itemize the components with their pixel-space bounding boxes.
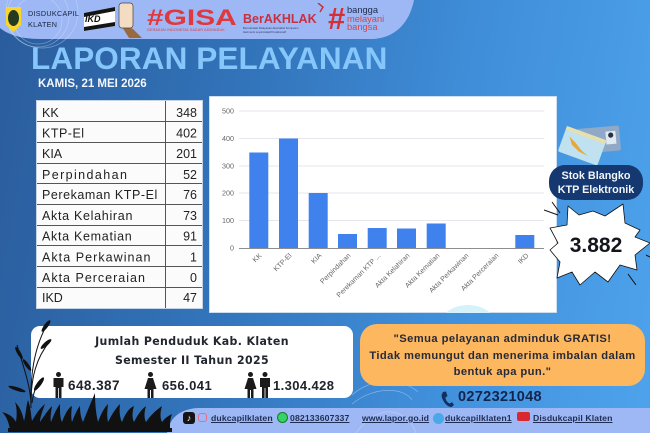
logo and agency name: KLATEN [28, 20, 57, 28]
twitter handle: dukcapilklaten1 [445, 413, 512, 423]
service table: 47 [183, 291, 197, 305]
bangga melayani bangsa logo: melayani [347, 14, 384, 24]
bar chart: IKD [517, 252, 530, 266]
stock number burst [544, 202, 650, 286]
bar chart: KIA [310, 252, 324, 265]
population panel [31, 326, 353, 398]
stock label: Stok Blangko [562, 170, 630, 182]
website: www.lapor.go.id [362, 413, 429, 423]
icon: twitter [433, 413, 444, 424]
female count: 656.041 [162, 378, 212, 393]
icon: instagram [198, 413, 207, 422]
service table: Akta Perceraian [42, 271, 146, 285]
service table [37, 101, 202, 308]
bar chart: Akta Perceraian [460, 252, 500, 293]
service table: KK [42, 106, 59, 120]
stock label [549, 165, 643, 200]
logo and agency name: DISDUKCAPIL [28, 9, 79, 18]
bar chart: Akta Kelahiran [374, 252, 411, 290]
total count: 1.304.428 [273, 378, 334, 393]
date: KAMIS, 21 MEI 2026 [38, 78, 147, 90]
service table: IKD [42, 291, 63, 305]
phone number: 0272321048 [458, 389, 542, 405]
social media footer [183, 412, 613, 424]
bar chart: 0 [230, 244, 234, 252]
icon: tiktok: ♪ [187, 413, 191, 423]
youtube channel: Disdukcapil Klaten [533, 413, 613, 423]
GISA logo: #GISA [147, 5, 237, 30]
bangga melayani bangsa logo: # [328, 1, 345, 36]
bar chart: 200 [222, 188, 234, 198]
service table: 76 [183, 188, 197, 202]
service table: 73 [183, 209, 197, 223]
icon: tiktok [183, 412, 195, 424]
bar chart: KK [252, 252, 264, 264]
free service callout: Tidak memungut dan menerima imbalan dalam [369, 350, 636, 362]
stock number burst: 3.882 [570, 234, 622, 257]
icon: youtube [517, 412, 530, 421]
icon: ID cards [558, 126, 621, 165]
bar chart: 100 [222, 216, 234, 225]
service table: 52 [183, 168, 197, 182]
free service callout [360, 324, 645, 386]
BerAKHLAK logo: BerAKHLAK [243, 12, 317, 26]
whatsapp number: 082133607337 [290, 413, 349, 423]
reeds and grass silhouette [2, 320, 172, 432]
IKD logo with phone: IKD [85, 14, 100, 24]
population heading: Semester II Tahun 2025 [115, 353, 269, 367]
IKD logo with phone [84, 2, 142, 38]
male count: 648.387 [68, 378, 120, 393]
bangga melayani bangsa logo: bangga [347, 5, 378, 15]
total count [244, 372, 334, 398]
bar chart [209, 96, 557, 313]
bar chart: Perpindahan [319, 252, 352, 285]
service table: 402 [176, 126, 197, 140]
service table: 91 [183, 230, 197, 244]
service table: 1 [190, 250, 197, 264]
population heading: Jumlah Penduduk Kab. Klaten [95, 334, 289, 348]
BerAKHLAK logo [243, 3, 324, 34]
service table: KIA [42, 147, 63, 161]
population heading [94, 334, 289, 367]
icon: whatsapp [277, 412, 288, 423]
bar chart: Akta Perkawinan [428, 252, 470, 295]
GISA logo: GERAKAN INDONESIA SADAR ADMINDUK [147, 28, 225, 32]
service table: KTP-El [42, 126, 85, 140]
free service callout: "Semua pelayanan adminduk GRATIS! [394, 333, 611, 345]
bar chart: 500 [222, 106, 234, 116]
stock label: KTP Elektronik [558, 184, 634, 196]
logo and agency name [6, 7, 79, 32]
free service callout: bentuk apa pun." [454, 366, 551, 378]
service table: 348 [176, 106, 197, 120]
bar chart: Perekaman KTP ... [336, 252, 382, 299]
service table: Akta Kematian [42, 230, 132, 244]
bar chart: KTP-El [273, 252, 294, 273]
bangga melayani bangsa logo [328, 1, 384, 36]
tiktok and instagram handle: dukcapilklaten [211, 413, 273, 423]
title: LAPORAN PELAYANAN [31, 40, 387, 76]
bangga melayani bangsa logo: bangsa [347, 22, 378, 32]
bar chart: 400 [222, 134, 234, 143]
service table: 201 [176, 147, 197, 161]
female count [144, 372, 212, 398]
bar chart: Akta Kematian [404, 252, 441, 290]
BerAKHLAK logo: Berorientasi Pelayanan Akuntabel Kompeten [243, 26, 299, 30]
bar chart: 300 [222, 162, 234, 170]
service table: Perekaman KTP-El [42, 188, 158, 202]
service table: Akta Kelahiran [42, 209, 133, 223]
service table: Akta Perkawinan [42, 250, 152, 264]
service table: Perpindahan [42, 168, 128, 182]
BerAKHLAK logo: Harmonis Loyal Adaptif Kolaboratif [243, 30, 286, 34]
service table: 0 [190, 271, 197, 285]
male count [54, 372, 120, 398]
